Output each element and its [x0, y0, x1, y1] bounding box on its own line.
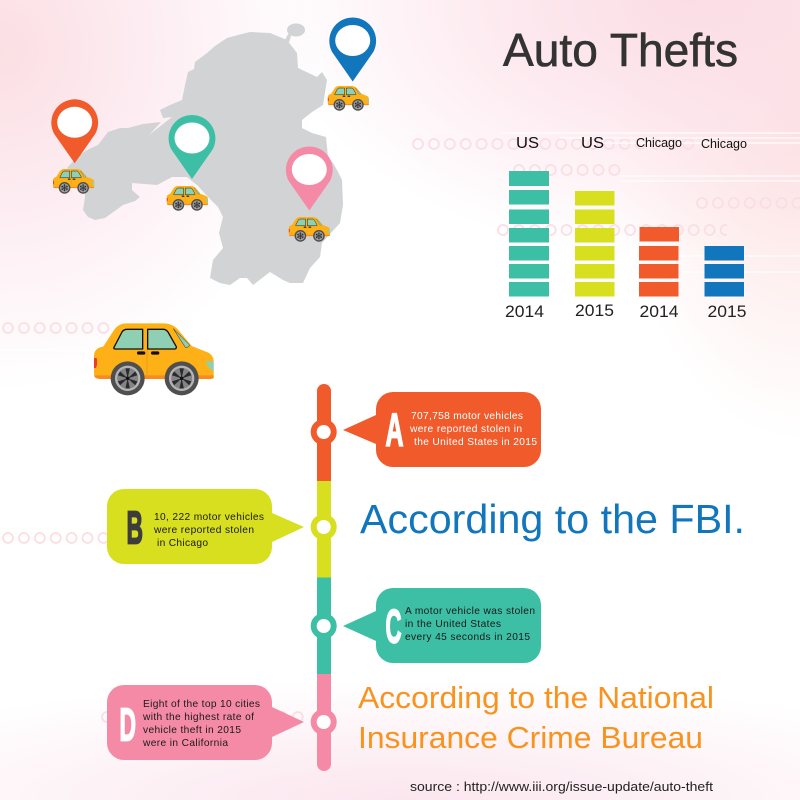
callout D: D	[120, 698, 136, 750]
bar: US 2014	[509, 171, 549, 296]
callout C: C	[386, 600, 402, 652]
title: Auto Thefts	[503, 24, 738, 76]
callout A	[343, 392, 541, 467]
callout A: the United States in 2015	[414, 437, 537, 448]
pin: orange	[51, 99, 98, 163]
bar: Chicago 2014	[639, 227, 679, 296]
callout B: were reported stolen	[153, 525, 254, 536]
small car under blue pin	[328, 86, 369, 111]
heading: according to the National Insurance Crime Bureau: According to the National	[358, 680, 714, 715]
large car illustration	[94, 323, 214, 395]
column labels: US	[516, 135, 539, 152]
callout C	[343, 588, 541, 663]
bar: Chicago 2015	[704, 246, 744, 296]
callout A: 707,758 motor vehicles	[411, 411, 523, 422]
timeline spine	[314, 384, 334, 771]
callout B: B	[126, 502, 143, 554]
heading: according to the National Insurance Crime Bureau: Insurance Crime Bureau	[358, 720, 703, 755]
small car under orange pin	[53, 169, 94, 194]
column labels: US	[581, 135, 604, 152]
map silhouette	[67, 24, 343, 285]
callout D: with the highest rate of	[142, 712, 254, 723]
bar chart	[505, 135, 747, 321]
column labels: Chicago	[701, 136, 747, 151]
callout A: were reported stolen in	[409, 424, 522, 435]
pin: teal	[169, 115, 215, 179]
small car under teal pin	[167, 186, 208, 211]
pin: pink	[286, 147, 333, 210]
year labels: 2014	[640, 302, 678, 321]
year labels: 2015	[575, 301, 614, 320]
callout D	[107, 685, 304, 760]
column labels	[516, 135, 747, 152]
callout B: in Chicago	[157, 538, 208, 549]
callout D: were in California	[142, 738, 228, 749]
year labels	[505, 301, 746, 321]
callout C: in the United States	[405, 619, 501, 630]
year labels: 2015	[708, 302, 746, 321]
background ring rows and light streaks	[0, 133, 800, 725]
callout D: vehicle theft in 2015	[143, 725, 241, 736]
callout C: A motor vehicle was stolen	[405, 606, 535, 617]
small car under pink pin	[289, 217, 330, 242]
callout D: Eight of the top 10 cities	[143, 699, 260, 710]
callout A: A	[386, 404, 404, 456]
year labels: 2014	[505, 302, 544, 321]
callout C: every 45 seconds in 2015	[405, 632, 530, 643]
pin: blue	[329, 18, 376, 81]
heading: according to the FBI: According to the FBI.	[360, 496, 745, 542]
bar: US 2015	[575, 191, 614, 296]
column labels: Chicago	[636, 135, 682, 150]
heading: according to the National Insurance Crime Bureau	[358, 680, 714, 755]
callout B: 10, 222 motor vehicles	[154, 512, 264, 523]
callout B	[107, 489, 304, 564]
source line: source : http://www.iii.org/issue-update/auto-theft	[410, 779, 713, 794]
